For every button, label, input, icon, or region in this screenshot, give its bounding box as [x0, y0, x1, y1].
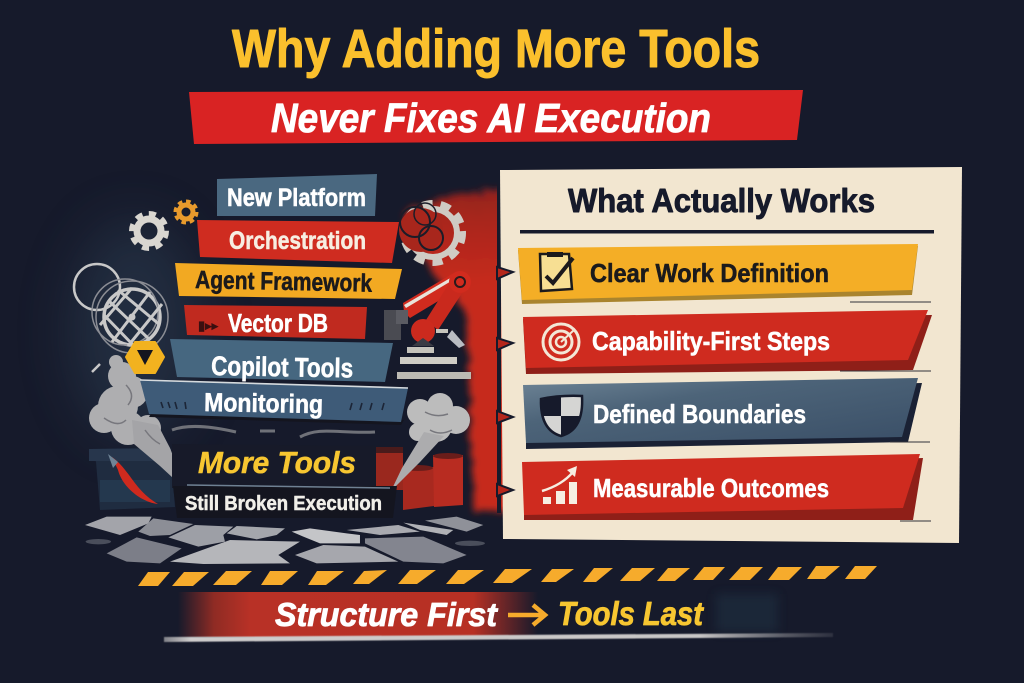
stack label: more tools	[172, 444, 376, 488]
subtitle banner: Never Fixes AI Execution	[271, 95, 711, 141]
bottom banner	[164, 592, 833, 642]
red glow behind machinery	[402, 186, 510, 512]
warning hexagon	[126, 342, 164, 373]
stack bar: new platform	[217, 174, 377, 216]
card: measurable outcomes: Measurable Outcomes	[593, 473, 829, 503]
panel: what actually works	[500, 167, 962, 543]
stack bar: monitoring	[140, 380, 408, 425]
mesh globe with rings	[74, 264, 168, 372]
stack bar: vector db	[184, 305, 367, 339]
stack bar: vector db: ▮▸▸	[198, 318, 220, 333]
card: defined boundaries	[523, 378, 930, 449]
dark gutter beside panel	[497, 168, 501, 513]
stack label: more tools: More Tools	[198, 445, 356, 480]
hazard stripe	[138, 566, 877, 586]
right gear with red circles	[399, 203, 462, 262]
stack bar: agent framework: Agent Framework	[195, 266, 372, 298]
stack bar: still broken execution: Still Broken Execution	[185, 492, 382, 515]
bottom banner: Structure First	[275, 596, 499, 633]
left smoke	[89, 355, 186, 490]
tool stack tower	[140, 174, 408, 518]
white gear	[132, 214, 166, 248]
crate with red feather	[89, 447, 175, 510]
panel heading: What Actually Works	[568, 182, 875, 219]
stack bar: still broken execution	[173, 485, 397, 518]
connector spikes	[497, 267, 513, 496]
stack bar: vector db: Vector DB	[228, 308, 328, 338]
red barrels	[375, 447, 463, 510]
orange gear	[176, 202, 196, 222]
stack bar: monitoring: Monitoring	[204, 387, 323, 419]
card: clear work definition	[518, 244, 931, 304]
arrow	[508, 605, 545, 625]
card: capability-first steps: Capability-First Steps	[592, 326, 830, 356]
right smoke	[391, 393, 470, 491]
debris under tower	[172, 426, 375, 437]
card: measurable outcomes	[522, 454, 931, 521]
icon: shield	[541, 396, 582, 436]
robot arm on platform	[384, 271, 471, 379]
stack bar: orchestration	[197, 220, 399, 263]
stack bar: copilot tools	[170, 339, 393, 383]
icon: rising bar chart	[542, 466, 577, 504]
card: defined boundaries: Defined Boundaries	[593, 399, 806, 429]
cracked floor	[85, 517, 485, 564]
bottom banner: Tools Last	[558, 595, 705, 632]
stack bar: new platform: New Platform	[227, 184, 366, 212]
subtitle banner	[189, 90, 803, 144]
stack bar: orchestration: Orchestration	[229, 227, 366, 255]
title: Why Adding More Tools	[232, 19, 760, 79]
icon: clipboard	[540, 252, 573, 291]
blue haze behind tower	[70, 220, 200, 440]
card: capability-first steps	[523, 310, 932, 374]
card: clear work definition: Clear Work Definition	[590, 258, 829, 288]
stack bar: copilot tools: Copilot Tools	[211, 351, 353, 383]
icon: target	[543, 324, 579, 360]
